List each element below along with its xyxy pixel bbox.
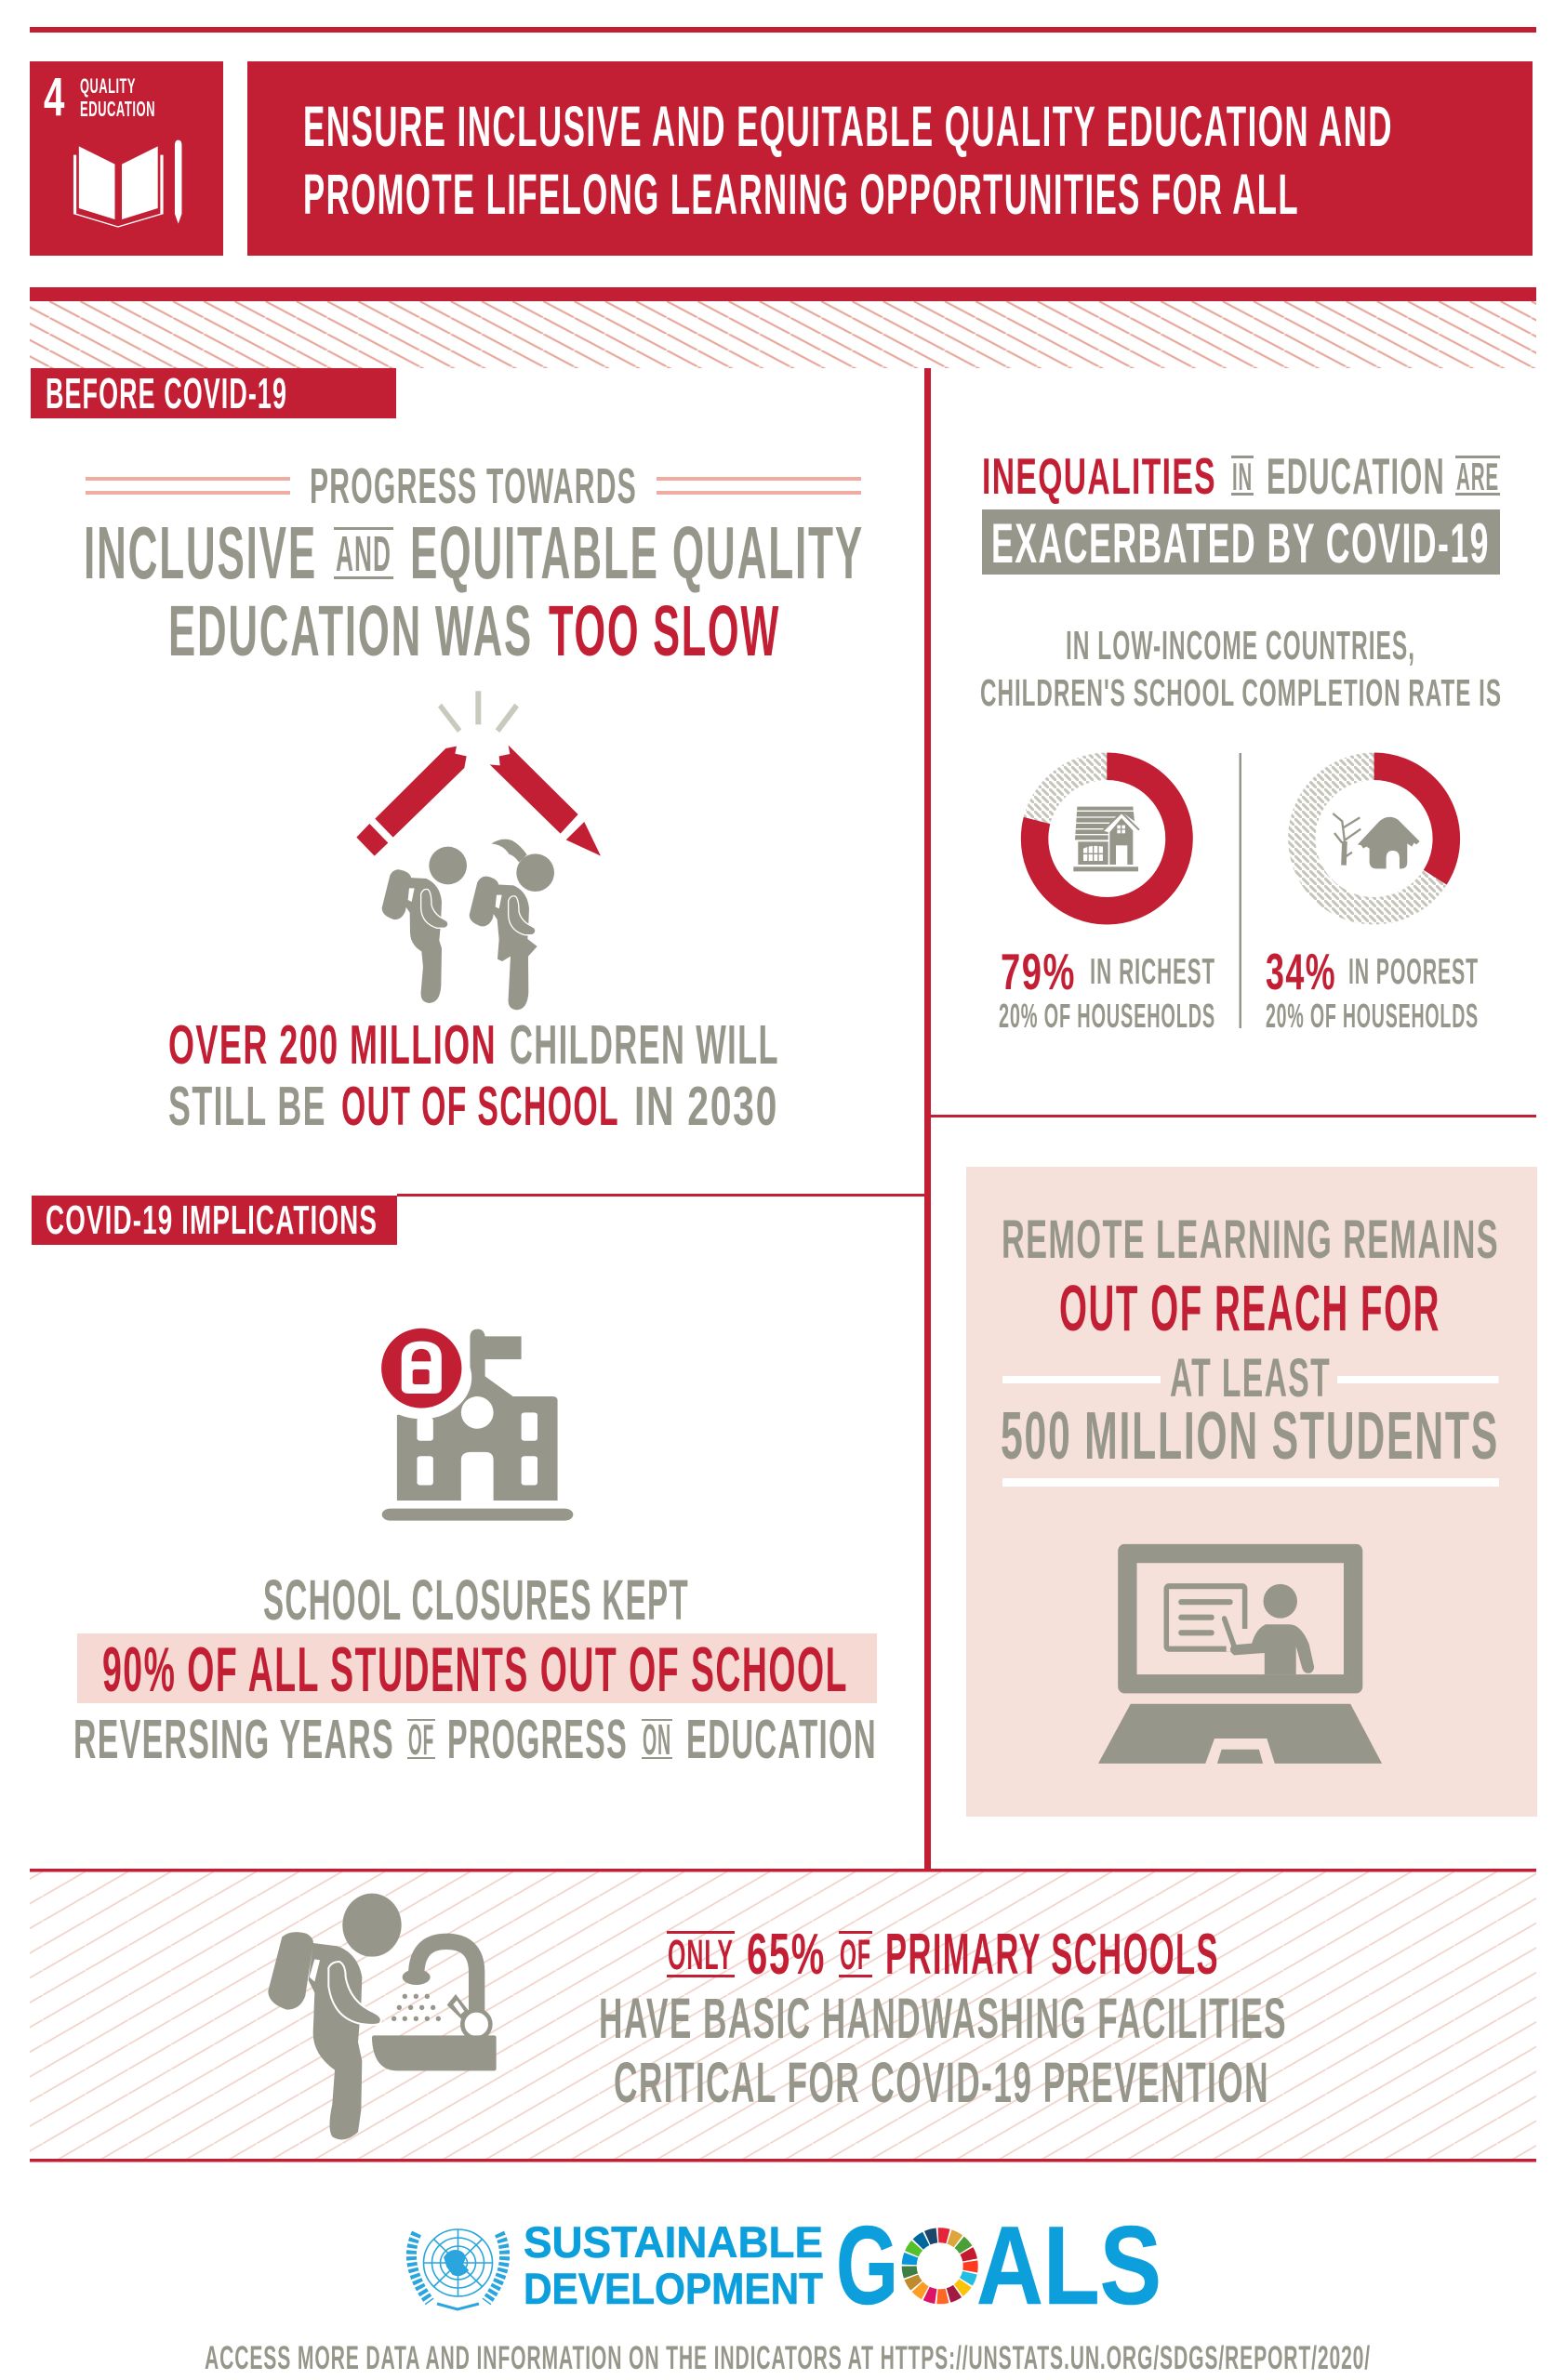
text: only 65% of primary schools: 65% (747, 1923, 826, 1987)
wordmark: goals: G (836, 2203, 898, 2328)
icon: two children with backpacks (382, 840, 554, 1010)
title (303, 95, 1393, 226)
label: 34% in poorest (1266, 943, 1479, 1035)
section tab: covid-19 implications (32, 1196, 397, 1245)
label: 79% in richest: 79% (1001, 943, 1076, 1000)
heading: inclusive and equitable quality: INCLUSIVE (84, 511, 317, 594)
wordmark: goals: ALS (976, 2203, 1161, 2328)
panel: covid-19 implications (32, 1196, 877, 1770)
icon: broken pencil roof with sparks (356, 691, 601, 856)
callout: 90% of all students out of school: 90% OF ALL STUDENTS OUT OF SCHOOL (102, 1634, 848, 1705)
header bar with hatching (30, 287, 1536, 368)
panel: handwashing (30, 1869, 1536, 2162)
label: 79% in richest: 20% OF HOUSEHOLDS (999, 997, 1215, 1035)
goal number: 4 (44, 67, 66, 127)
panel: goal 4 badge (30, 61, 223, 256)
text: over 200 million children (168, 1014, 779, 1137)
text: reversing years of progress on education: PROGRESS (447, 1709, 628, 1770)
text: reversing years of progress on education: OF (408, 1715, 434, 1764)
heading: education was too slow: EDUCATION WAS (168, 591, 533, 671)
heading: inclusive and equitable quality: AND (336, 526, 392, 582)
text: only 65% of primary schools: OF (840, 1931, 871, 1978)
heading: inclusive and equitable quality: EQUITABLE QUALITY (410, 511, 864, 594)
panel: goal title banner (247, 61, 1533, 256)
text: over 200 million children: IN 2030 (634, 1076, 778, 1137)
text: only 65% of primary schools: ONLY (668, 1931, 734, 1978)
section tab: before covid-19: BEFORE COVID-19 (46, 369, 287, 417)
icon: locked school (371, 1329, 573, 1521)
icon: girl (470, 840, 554, 1010)
text: at least with rules (1002, 1348, 1499, 1408)
panel: remote learning (966, 1167, 1537, 1817)
wordmark: sustainable development: DEVELOPMENT (524, 2264, 823, 2313)
heading: progress towards: PROGRESS TOWARDS (310, 458, 637, 514)
icon: book and pencil (75, 140, 181, 227)
text: reversing years of progress on education: REVERSING YEARS (73, 1709, 394, 1770)
heading: inequalities in education are: ARE (1456, 455, 1499, 498)
panel: before covid-19 (31, 368, 864, 1137)
heading: progress towards (86, 458, 861, 514)
label: 79% in richest: IN RICHEST (1090, 952, 1215, 992)
heading: inequalities in education are: IN (1232, 455, 1253, 498)
text: over 200 million children: OVER 200 MILLION (168, 1014, 497, 1076)
chart: richest donut 79% (1035, 766, 1179, 911)
text: low-income countries (980, 623, 1502, 714)
wordmark: goals (836, 2203, 1161, 2328)
goal name: EDUCATION (80, 97, 155, 121)
icon: UN emblem (411, 2229, 505, 2309)
icon: hut and bare tree (1333, 813, 1420, 869)
heading: inequalities in education are: INEQUALITIES (982, 447, 1216, 505)
heading: inclusive and equitable quality (84, 511, 864, 594)
icon: sdg colour wheel (896, 2223, 983, 2309)
text: at least with rules: AT LEAST (1170, 1348, 1331, 1408)
text: only 65% of primary schools: PRIMARY SCHOOLS (885, 1923, 1219, 1987)
section tab: covid-19 implications: COVID-19 IMPLICATIONS (46, 1197, 378, 1243)
section divider lines (397, 368, 1536, 1870)
wordmark: sustainable development (524, 2217, 823, 2313)
text: reversing years of progress on education: EDUCATION (686, 1709, 877, 1770)
donut divider (1239, 753, 1241, 1028)
text: over 200 million children: STILL BE (168, 1076, 326, 1137)
top rule (30, 27, 1536, 33)
label: 79% in richest (999, 943, 1215, 1035)
panel: inequalities in education (980, 447, 1502, 1035)
icon: laptop with teacher (1098, 1544, 1382, 1764)
text: over 200 million children: OUT OF SCHOOL (341, 1076, 619, 1137)
icon: child washing hands (268, 1894, 497, 2140)
label: 34% in poorest: 34% (1266, 943, 1336, 1000)
goal name: QUALITY (80, 74, 136, 98)
text: over 200 million children: CHILDREN WILL (510, 1014, 779, 1076)
heading: education was too slow: TOO SLOW (549, 591, 780, 671)
wordmark: sustainable development: SUSTAINABLE (524, 2217, 823, 2267)
logo: sustainable development goals (411, 2203, 1161, 2328)
text: school closures kept: SCHOOL CLOSURES KEPT (263, 1568, 689, 1632)
goal name (80, 74, 155, 121)
callout: 90% of all students out of school (77, 1633, 877, 1705)
icon: house (1073, 807, 1139, 871)
icon: boy (382, 847, 467, 1003)
text: only 65% of primary schools (667, 1923, 1219, 1987)
text: reversing years of progress on education (73, 1709, 877, 1770)
chart: poorest donut 34% (1302, 766, 1446, 911)
text: reversing years of progress on education: ON (643, 1715, 671, 1764)
